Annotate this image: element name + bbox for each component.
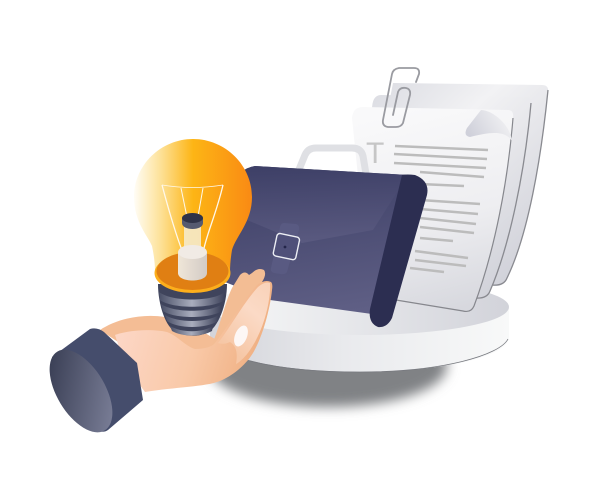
paper clip — [383, 68, 419, 127]
shirt cuff — [37, 328, 143, 443]
page fold — [466, 110, 512, 141]
glass — [134, 139, 252, 272]
light bulb — [134, 139, 252, 336]
briefcase — [225, 166, 428, 327]
orange collar — [156, 252, 228, 290]
filament cap — [182, 213, 203, 229]
back of hand — [100, 316, 225, 358]
buckle — [273, 233, 300, 260]
hand — [115, 269, 272, 392]
case body — [225, 166, 408, 314]
strap — [271, 223, 299, 274]
collar rim — [154, 253, 230, 293]
middle paper — [372, 95, 531, 298]
inner glass stem — [184, 224, 201, 252]
palm — [115, 281, 272, 392]
front paper with text lines — [352, 107, 513, 311]
filament wires — [162, 185, 223, 253]
platform — [210, 279, 509, 372]
case side panel — [370, 174, 428, 327]
text lines — [394, 146, 488, 272]
heading letter T: T — [366, 137, 384, 170]
front finger highlight — [218, 282, 270, 364]
stem cylinder — [178, 245, 207, 280]
back paper — [380, 83, 548, 286]
case flap — [225, 166, 408, 243]
briefcase handle — [298, 148, 366, 174]
ground shadow — [209, 325, 447, 407]
fingernail — [231, 324, 251, 348]
screw base — [158, 284, 227, 336]
rear fingers — [212, 269, 265, 345]
